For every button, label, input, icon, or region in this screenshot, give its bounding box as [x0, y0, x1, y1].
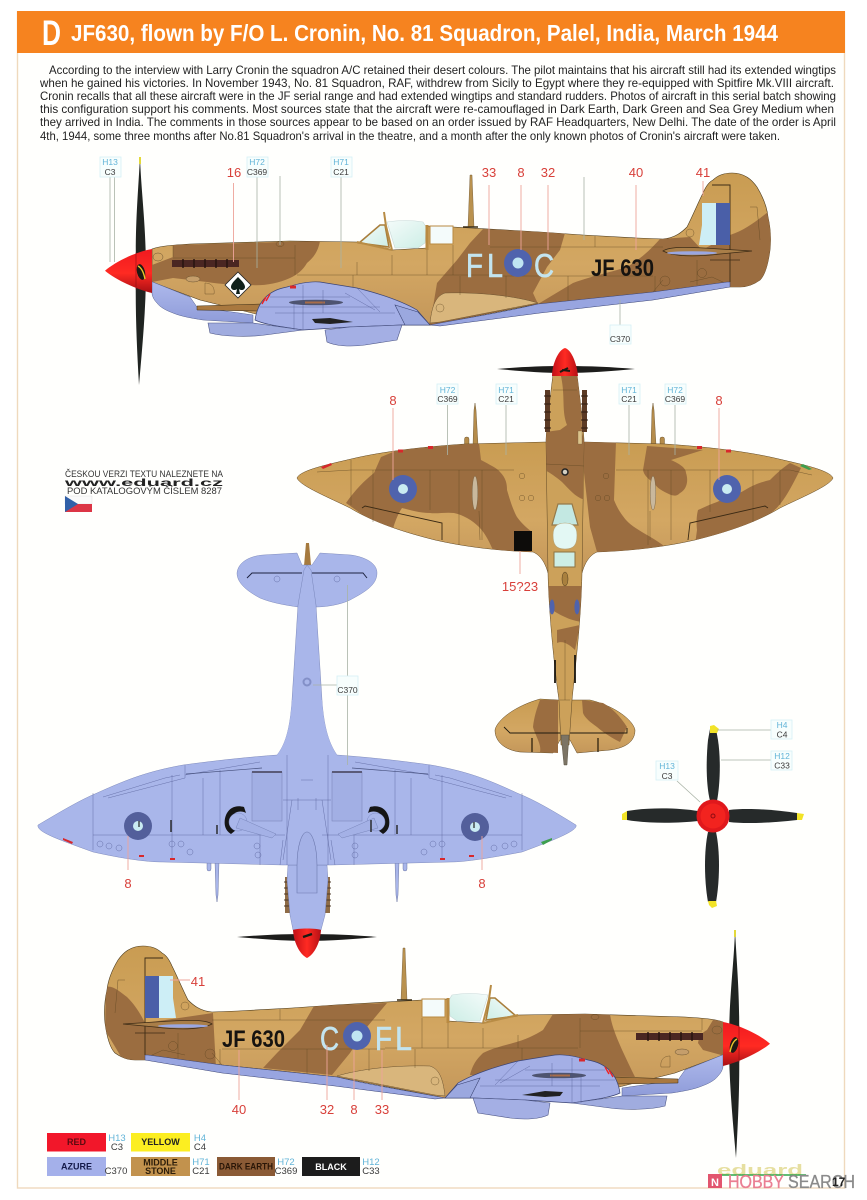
- squadron emblem: [225, 272, 251, 298]
- callouts: propeller: H12: [774, 751, 790, 761]
- wings: [38, 755, 576, 865]
- swatch: azure: [47, 1157, 106, 1176]
- cannons: [464, 403, 664, 446]
- radiators: [252, 772, 362, 821]
- tailplane: [495, 699, 635, 753]
- title letter: D: [42, 14, 61, 53]
- callouts: propeller: H13: [659, 761, 675, 771]
- paint codes: H72: [277, 1157, 295, 1168]
- wing markings: [63, 838, 474, 860]
- serial number: JF 630: [222, 1026, 285, 1053]
- callouts: upper plan: H71: [621, 385, 637, 395]
- intro text block: they arrived in India. The comments in those sources appear to be based on an order issued by RAF Headquarters, New Delhi. The date of the order is April: [40, 116, 836, 129]
- eduard logo: [717, 1162, 806, 1179]
- propeller front view: [622, 725, 804, 908]
- intro text block: Cronin recalls that all these aircraft were in the JF serial range and had extended wingtips and standard rudders. Photos of aircraft in this serial batch showing: [40, 90, 836, 103]
- callouts: upper plan: 8: [715, 393, 723, 408]
- code letters FL C: L: [487, 247, 503, 284]
- swatch: middle stone: MIDDLE: [143, 1158, 178, 1168]
- aircraft: left side profile: [105, 157, 775, 385]
- callouts: side profile: H13: [102, 157, 118, 167]
- callouts: side profile: H71: [333, 157, 349, 167]
- code letters FL C: C: [534, 247, 554, 284]
- Czech version note: [63, 469, 224, 512]
- aircraft: upper surface plan: [297, 348, 833, 765]
- callouts: side profile: 32: [541, 165, 555, 180]
- icon: Czech flag: [65, 496, 92, 512]
- swatch: red: [47, 1133, 106, 1152]
- page number: 17: [832, 1175, 846, 1189]
- paint codes: [105, 1133, 380, 1177]
- intro text block: [39, 64, 836, 143]
- aircraft: right side profile: [104, 930, 770, 1158]
- paint codes: H71: [192, 1157, 210, 1168]
- code letters C FL: F: [375, 1020, 392, 1057]
- callouts: lower plan: 8: [478, 876, 486, 891]
- propeller: [237, 934, 377, 941]
- callouts: side profile: 33: [482, 165, 496, 180]
- callouts: lower plan: [124, 585, 486, 891]
- callouts: lower plan: 8: [124, 876, 132, 891]
- intro text block: when he gained his victories. In November 1943, No. 81 Squadron, RAF, withdrew from Sicily to Egypt where they re-equipped with Spitfire Mk.VIII aircraft.: [39, 77, 834, 90]
- callouts: side profile: 41: [696, 165, 710, 180]
- callouts: propeller: H4: [777, 720, 788, 730]
- Czech version note: POD KATALOGOVÝM ČÍSLEM 8287: [67, 486, 222, 497]
- callouts: right side profile: 32: [320, 1102, 334, 1117]
- code letters C FL: C: [320, 1020, 339, 1057]
- code letters C FL: [320, 1020, 412, 1057]
- spinner: [293, 928, 321, 958]
- Czech version note: ČESKOU VERZI TEXTU NALEZNETE NA: [65, 469, 224, 480]
- paint codes: H12: [362, 1157, 380, 1168]
- callouts: side profile: C21: [333, 167, 349, 177]
- aircraft: lower surface plan: [38, 543, 576, 958]
- watermark: Hobby Search: [708, 1172, 855, 1192]
- paint codes: C21: [192, 1166, 210, 1177]
- callouts: right side profile: [170, 974, 389, 1117]
- canopy: [552, 504, 578, 567]
- tailplane: [237, 553, 377, 607]
- callouts: upper plan: [389, 384, 723, 594]
- watermark: Hobby Search: SEARCH: [788, 1172, 855, 1192]
- fuselage: [546, 374, 584, 745]
- callouts: upper plan: C369: [665, 394, 685, 404]
- callouts: right side profile: 8: [350, 1102, 358, 1117]
- callouts: side profile: 40: [629, 165, 643, 180]
- centre belly: [297, 832, 317, 893]
- watermark: Hobby Search: HOBBY: [728, 1172, 784, 1192]
- wing markings: [321, 446, 731, 469]
- paint codes: H4: [194, 1133, 206, 1144]
- swatch: black: BLACK: [315, 1162, 347, 1172]
- callouts: side profile: C3: [105, 167, 116, 177]
- propeller: [497, 366, 635, 373]
- intro text block: this configuration support his comments. Most sources state that the aircraft were re-camouflaged in Dark Earth, Dark Green and Sea Grey Medium when: [40, 103, 834, 116]
- header bar: [17, 11, 845, 53]
- code letters C FL: L: [395, 1020, 412, 1057]
- callouts: upper plan: C21: [498, 394, 514, 404]
- swatch: red: RED: [67, 1137, 86, 1147]
- callouts: side profile: C369: [247, 167, 267, 177]
- swatch: middle stone: STONE: [145, 1166, 176, 1176]
- callouts: right side profile: 40: [232, 1102, 246, 1117]
- serial number: JF 630: [591, 255, 654, 282]
- Czech version note: www.eduard.cz: [63, 478, 223, 489]
- code letters FL C: [466, 247, 554, 284]
- swatch: dark earth: [217, 1157, 275, 1176]
- wing roundels: [389, 475, 417, 503]
- paint codes: C4: [194, 1142, 206, 1153]
- swatch: dark earth: DARK EARTH: [219, 1162, 273, 1172]
- wing panel lines: [317, 460, 812, 545]
- callouts: propeller: [656, 720, 792, 802]
- black walkway panel: [514, 531, 532, 551]
- flap gear lines: [186, 768, 428, 774]
- nose: [287, 865, 328, 930]
- callouts: upper plan: 15?23: [502, 579, 538, 594]
- code letters FL C: F: [466, 247, 483, 284]
- callouts: upper plan: 8: [389, 393, 397, 408]
- paint codes: C369: [275, 1166, 297, 1177]
- callouts: propeller: C3: [662, 771, 673, 781]
- swatch: yellow: [131, 1133, 190, 1152]
- title: JF630, flown by F/O L. Cronin, No. 81 Squadron, Palel, India, March 1944: [71, 20, 778, 46]
- wing panel lines: [93, 755, 522, 865]
- callouts: side profile: 16: [227, 165, 241, 180]
- exhausts: [285, 877, 330, 913]
- wing roundels: [124, 812, 152, 840]
- cannons: [207, 861, 407, 902]
- swatch: yellow: YELLOW: [141, 1137, 180, 1147]
- intro text block: According to the interview with Larry Cronin the squadron A/C retained their desert colours. The pilot maintains that his aircraft still had its extended wingtips: [49, 64, 836, 77]
- fuselage roundels: [549, 600, 555, 614]
- callouts: lower plan: C370: [337, 685, 358, 695]
- callouts: upper plan: H72: [440, 385, 456, 395]
- callouts: upper plan: H72: [667, 385, 683, 395]
- rudder: [304, 543, 311, 566]
- callouts: side profile: 8: [517, 165, 525, 180]
- callouts: right side profile: 41: [191, 974, 205, 989]
- swatch: azure: AZURE: [61, 1162, 92, 1172]
- callouts: upper plan: C369: [437, 394, 458, 404]
- watermark: Hobby Search: N: [711, 1177, 719, 1189]
- rudder: [561, 735, 569, 765]
- callouts: upper plan: H71: [498, 385, 514, 395]
- intro text block: 4th, 1944, some three months after No.81 Squadron's arrival in the theatre, and a month after the only known photos of Cronin's aircraft were taken.: [40, 130, 780, 143]
- wheel wells: [225, 806, 389, 838]
- callouts: upper plan: C21: [621, 394, 637, 404]
- swatch: black: [302, 1157, 360, 1176]
- callouts: propeller: C33: [774, 760, 790, 770]
- callouts: right side profile: 33: [375, 1102, 389, 1117]
- callouts: propeller: C4: [777, 730, 788, 740]
- paint codes: H13: [108, 1133, 126, 1144]
- callouts: side profile: [100, 157, 710, 344]
- paint codes: C370: [105, 1166, 127, 1177]
- fuselage tail boom: [277, 565, 337, 755]
- colour legend: [47, 1133, 380, 1177]
- wings: [297, 442, 833, 573]
- swatch: middle stone: [131, 1157, 190, 1176]
- paint codes: C3: [111, 1142, 123, 1153]
- callouts: side profile: H72: [249, 157, 265, 167]
- eduard logo: eduard: [717, 1162, 803, 1179]
- spinner: [552, 348, 578, 376]
- paint codes: C33: [362, 1166, 380, 1177]
- exhausts: [545, 390, 587, 432]
- callouts: side profile: C370: [610, 334, 630, 344]
